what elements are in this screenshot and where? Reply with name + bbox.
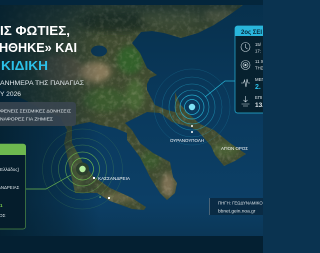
leader line: first quake xyxy=(26,175,71,189)
subtitle: ΑΝΗΜΕΡΑ ΤΗΣ ΠΑΝΑΓΙΑΣ xyxy=(0,80,84,87)
panel: first earthquake: 1 xyxy=(0,203,3,208)
lake xyxy=(91,46,107,56)
epicentre: second quake xyxy=(154,69,230,145)
left dark overlay xyxy=(0,0,100,253)
panel: second earthquake: ΕΠΙ xyxy=(255,95,262,100)
panel: first earthquake: Ελλάδος) xyxy=(0,166,20,172)
subtitle xyxy=(0,80,84,98)
icon: depth xyxy=(242,96,250,106)
bottom band xyxy=(0,236,263,253)
source box xyxy=(209,198,263,215)
title xyxy=(0,24,77,73)
location: Mount Athos: ΑΓΙΟΝ ΟΡΟΣ xyxy=(221,146,248,151)
panel: second earthquake: 2ος ΣΕΙ xyxy=(241,30,262,36)
title: ΗΘΗΚΕ» ΚΑΙ xyxy=(0,41,77,55)
leader line: second quake xyxy=(205,81,235,97)
icon: target xyxy=(241,60,250,70)
callout: no damage reports: ΝΑΦΟΡΕΣ ΓΙΑ ΖΗΜΙΕΣ xyxy=(0,116,53,122)
location: Kassandreia: ΚΑΣΣΑΝΔΡΕΙΑ xyxy=(98,176,130,181)
land: mainland and peninsulas xyxy=(1,5,246,210)
source box: ΠΗΓΗ: ΓΕΩΔΥΝΑΜΙΚΟ xyxy=(218,200,263,206)
source box: bbnet.gein.noa.gr xyxy=(218,208,256,214)
panel: second earthquake xyxy=(235,26,269,113)
subtitle: Υ 2026 xyxy=(0,91,22,98)
panel: second earthquake: 15/ xyxy=(255,42,262,47)
callout: no damage reports xyxy=(0,102,76,126)
epicentre: first quake xyxy=(42,129,122,209)
panel: second earthquake: 2. xyxy=(255,84,261,91)
panel: first earthquake xyxy=(0,144,26,229)
panel header: second earthquake xyxy=(235,26,263,36)
title: ΙΣ ΦΩΤΙΕΣ, xyxy=(0,24,70,38)
top band xyxy=(0,0,263,5)
icon: seismic pulse xyxy=(241,79,250,87)
location: Ouranoupoli: ΟΥΡΑΝΟΥΠΟΛΗ xyxy=(170,138,204,143)
land colour patches xyxy=(38,9,239,202)
callout: no damage reports: ΦΕΝΕΙΣ ΣΕΙΣΜΙΚΕΣ ΔΟΝΗΣΕΙΣ xyxy=(0,108,71,114)
title: ΚΙΔΙΚΗ xyxy=(1,59,48,73)
location markers xyxy=(100,196,110,199)
panel header: first earthquake xyxy=(0,144,26,155)
icon: clock xyxy=(241,42,250,52)
location: Ouranoupoli xyxy=(170,125,204,143)
panel: second earthquake: 17: xyxy=(255,48,261,54)
